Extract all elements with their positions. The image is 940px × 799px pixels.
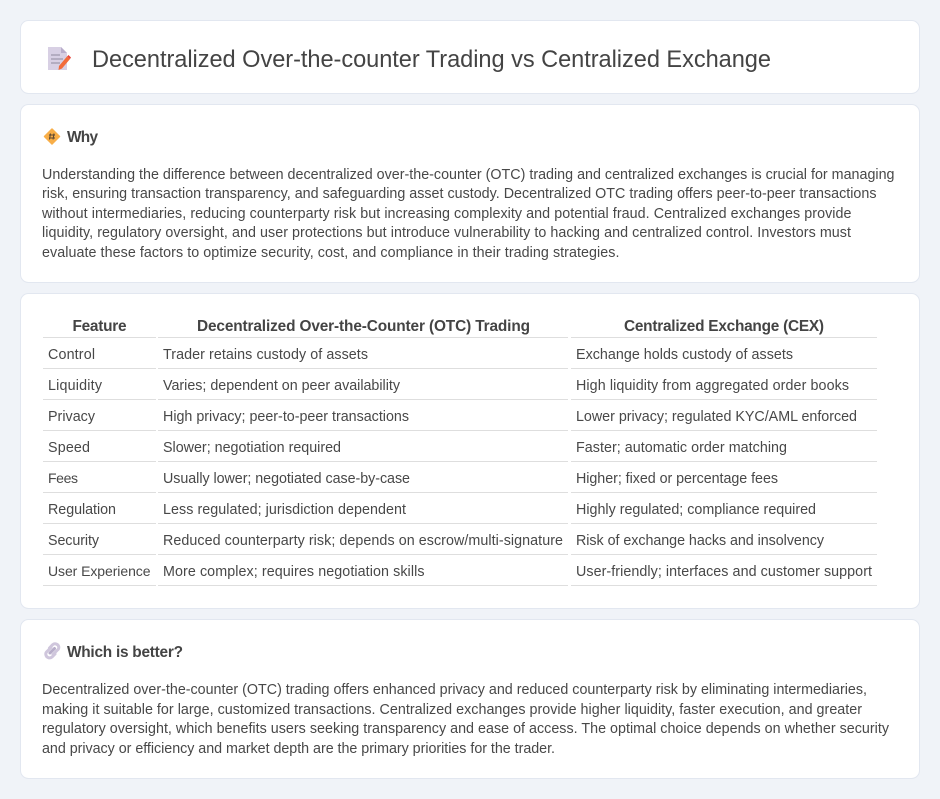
row: privacy: Lower privacy; regulated KYC/AML enforced [576, 409, 857, 425]
row: security: Risk of exchange hacks and insolvency [576, 533, 825, 549]
text block: which is better paragraph: regulatory oversight, which benefits users seeking transparency and ease of access. The optimal choice depends on whether security [42, 721, 890, 737]
row: privacy: High privacy; peer-to-peer transactions [163, 409, 409, 425]
icon: warning diamond [44, 129, 60, 144]
panel: why [20, 104, 920, 282]
row: privacy [48, 409, 857, 425]
text block: which is better paragraph: Decentralized over-the-counter (OTC) trading offers enhanced privacy and reduced counterparty risk by eliminating intermediaries, [42, 682, 867, 698]
table rules [43, 338, 877, 586]
text block: why paragraph: without intermediaries, reducing counterparty risk but increasing complexity and potential fraud. Centralized exchanges provide [41, 206, 852, 222]
row: speed [48, 440, 787, 456]
heading: which is better: Which is better? [67, 644, 183, 661]
row: user experience: User-friendly; interfaces and customer support [576, 564, 872, 580]
row: fees: Usually lower; negotiated case-by-case [163, 471, 410, 487]
table header row [72, 318, 824, 335]
row: control: Control [48, 347, 95, 363]
table header row: Centralized Exchange (CEX) [624, 318, 824, 335]
panel: which is better [20, 620, 920, 778]
icon: memo with pencil [48, 47, 71, 70]
row: security: Reduced counterparty risk; depends on escrow/multi-signature [163, 533, 563, 549]
text block: why paragraph: liquidity, regulatory oversight, and user protections but introduce vulnerability to hacking and centralized control. Investors must [42, 225, 851, 241]
row: user experience: More complex; requires negotiation skills [163, 564, 424, 580]
panel: comparison table [20, 294, 920, 608]
text block: why paragraph: risk, ensuring transaction transparency, and safeguarding asset custody. Decentralized OTC trading offers peer-to-peer transactions [42, 186, 876, 202]
row: regulation [48, 502, 816, 518]
row: privacy: Privacy [48, 409, 96, 425]
row: regulation: Less regulated; jurisdiction dependent [163, 502, 406, 518]
text block: which is better paragraph: making it suitable for large, customized transactions. Centralized exchanges provide higher liquidity, faster execution, and greater [42, 702, 862, 718]
row: control: Trader retains custody of assets [163, 347, 368, 363]
row: user experience: User Experience [48, 563, 151, 579]
icon: link [46, 644, 59, 658]
row: fees [48, 470, 778, 487]
row: control [48, 347, 793, 363]
row: regulation: Regulation [48, 502, 116, 518]
text block: why paragraph: Understanding the difference between decentralized over-the-counter (OTC) trading and centralized exchanges is crucial for managing [42, 167, 895, 183]
row: speed: Faster; automatic order matching [576, 440, 787, 456]
text block: which is better paragraph [42, 682, 890, 757]
row: liquidity [48, 378, 849, 394]
row: user experience [48, 563, 872, 580]
text block: which is better paragraph: and privacy or efficiency and market depth are the primary priorities for the trader. [42, 741, 555, 757]
row: speed: Slower; negotiation required [163, 440, 341, 456]
row: liquidity: High liquidity from aggregated order books [576, 378, 849, 394]
row: speed: Speed [48, 440, 90, 456]
panel: title header [20, 20, 920, 94]
row: fees: Higher; fixed or percentage fees [576, 471, 778, 487]
row: liquidity: Varies; dependent on peer availability [163, 378, 401, 394]
row: security: Security [48, 533, 100, 549]
row: security [48, 533, 825, 549]
row: regulation: Highly regulated; compliance required [576, 502, 816, 518]
title: Decentralized Over-the-counter Trading vs Centralized Exchange [92, 47, 771, 73]
text block: why paragraph: evaluate these factors to optimize security, cost, and compliance in their trading strategies. [42, 245, 620, 261]
row: liquidity: Liquidity [48, 378, 103, 394]
row: control: Exchange holds custody of assets [576, 347, 793, 363]
table header row: Decentralized Over-the-Counter (OTC) Trading [197, 318, 530, 335]
heading: why: Why [67, 129, 98, 146]
table header row: Feature [72, 318, 127, 335]
text block: why paragraph [41, 167, 895, 261]
row: fees: Fees [48, 470, 78, 486]
